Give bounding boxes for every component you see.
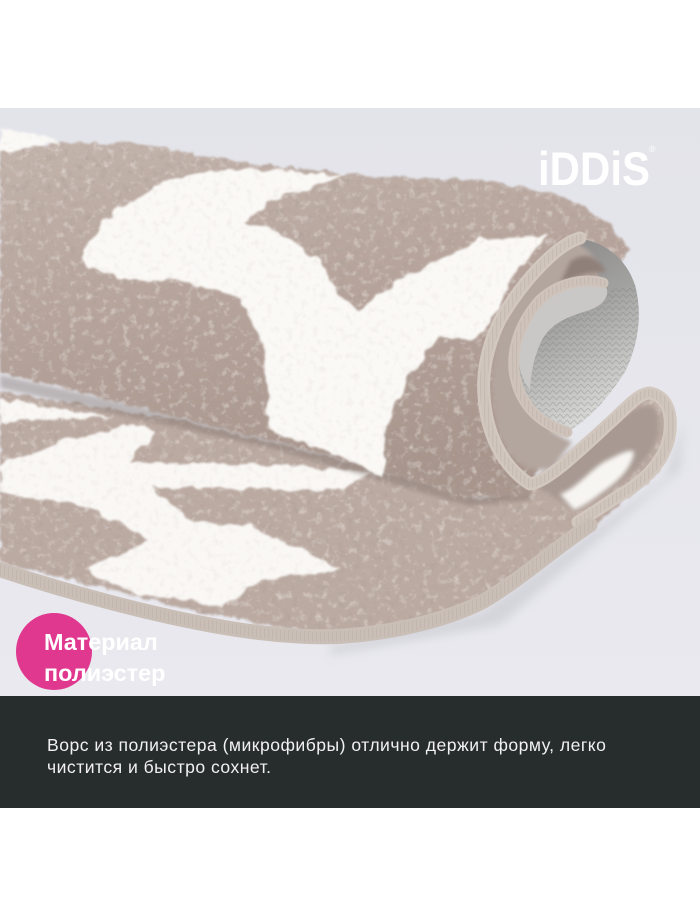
- description text: Ворс из полиэстера (микрофибры) отлично держит форму, легко: [47, 735, 606, 755]
- mat shadow: [330, 420, 684, 655]
- grey backing: [516, 238, 639, 432]
- badge text: Материал: [44, 629, 158, 655]
- logo: IDDIS: ®: [649, 144, 656, 154]
- badge: material: [16, 613, 165, 690]
- description text: чистится и быстро сохнет.: [47, 757, 272, 777]
- light backing fold: [518, 283, 607, 390]
- pink circle: [16, 613, 92, 690]
- backdrop: [0, 108, 700, 696]
- lower mat white pattern: [0, 398, 372, 606]
- badge text: полиэстер: [44, 660, 165, 686]
- upper white pattern: [0, 128, 548, 478]
- dark fluff at top of roll: [560, 256, 606, 284]
- inner lower fold: [528, 406, 659, 512]
- product photo: rolled bath mat: [0, 108, 700, 696]
- upper rolled mat: [0, 128, 630, 498]
- backing knit texture: [516, 285, 639, 432]
- pile between bindings: [493, 244, 600, 470]
- roll end: [493, 238, 639, 470]
- white patch in fold: [560, 451, 634, 510]
- badge text: [44, 629, 165, 686]
- shadow under roll: [0, 375, 530, 506]
- dark description band: [0, 696, 700, 808]
- bindings: [0, 238, 670, 637]
- logo: IDDIS: iDDiS: [538, 142, 650, 195]
- pale shadow strip: [530, 440, 586, 486]
- lower mat layer: [0, 392, 675, 636]
- description text: [47, 735, 606, 777]
